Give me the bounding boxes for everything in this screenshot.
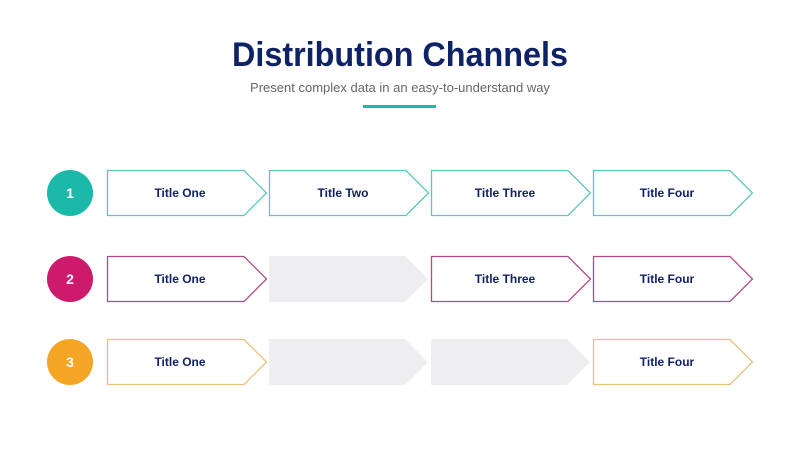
circle 1 xyxy=(47,170,93,216)
arrow: title one xyxy=(108,340,266,384)
arrow: title one: Title One xyxy=(154,355,206,369)
empty arrow xyxy=(269,339,428,385)
row 2 xyxy=(47,256,752,302)
circle 1: 1 xyxy=(66,185,74,201)
arrow: title one xyxy=(108,256,266,302)
arrow: title four: Title Four xyxy=(640,355,695,369)
arrow: title three: Title Three xyxy=(475,272,536,286)
arrow: title three: Title Three xyxy=(475,186,536,200)
arrow: title one: Title One xyxy=(154,186,206,200)
title: Distribution Channels xyxy=(232,36,568,74)
circle 2 xyxy=(47,256,93,302)
arrow: title four xyxy=(594,340,752,384)
circle 2: 2 xyxy=(66,271,74,287)
circle 3 xyxy=(47,339,93,385)
empty arrow xyxy=(269,256,428,302)
arrow: title two: Title Two xyxy=(318,186,368,200)
arrow: title two xyxy=(270,170,428,216)
arrow: title one: Title One xyxy=(154,272,206,286)
circle 3: 3 xyxy=(66,354,74,370)
row 3 xyxy=(47,339,752,385)
arrow: title one xyxy=(108,170,266,216)
title underline xyxy=(363,105,436,108)
arrow: title four: Title Four xyxy=(640,186,695,200)
empty arrow xyxy=(431,339,590,385)
arrow: title three xyxy=(432,170,590,216)
row 1 xyxy=(47,170,752,216)
arrow: title four: Title Four xyxy=(640,272,695,286)
arrow: title three xyxy=(432,256,590,302)
arrow: title four xyxy=(594,170,752,216)
subtitle: Present complex data in an easy-to-understand way xyxy=(250,80,550,95)
arrow: title four xyxy=(594,256,752,302)
